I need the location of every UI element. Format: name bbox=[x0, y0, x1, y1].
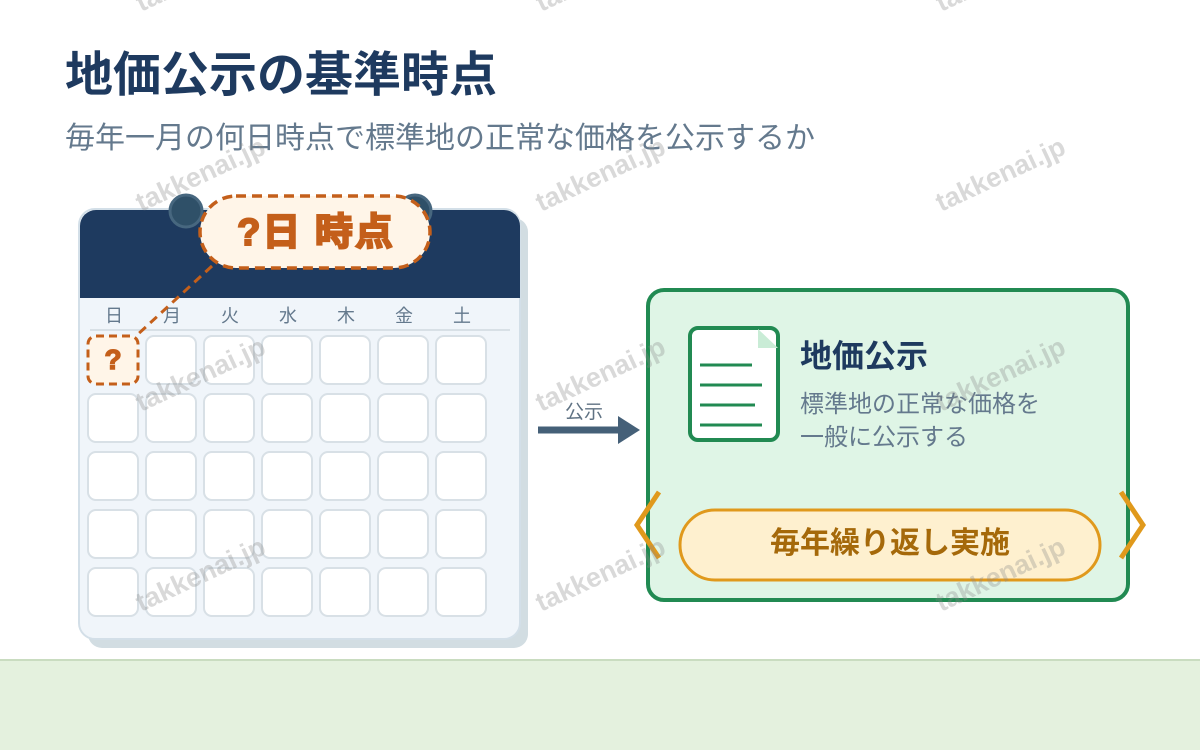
callout badge bbox=[200, 196, 430, 268]
title: 地価公示の基準時点 bbox=[65, 49, 497, 102]
highlighted question cell bbox=[88, 336, 138, 384]
panel description bbox=[800, 391, 1040, 451]
panel description: 一般に公示する bbox=[800, 424, 968, 451]
chevron left bbox=[637, 492, 659, 558]
watermarks: takkenai.jp bbox=[531, 331, 670, 417]
weekday labels: 金 bbox=[395, 306, 413, 326]
watermarks: takkenai.jp bbox=[131, 531, 270, 617]
callout badge: ?日 時点 bbox=[237, 212, 395, 254]
icon: document bbox=[690, 328, 778, 440]
calendar bbox=[79, 195, 528, 648]
arrow to publication bbox=[538, 401, 640, 444]
panel description: 標準地の正常な価格を bbox=[800, 391, 1040, 418]
watermarks: takkenai.jp bbox=[931, 131, 1070, 217]
repeat pill bbox=[680, 510, 1100, 580]
watermarks: takkenai.jp bbox=[531, 531, 670, 617]
weekday labels: 日 bbox=[105, 306, 123, 326]
weekday labels: 月 bbox=[163, 306, 181, 326]
panel: land price publication bbox=[637, 290, 1143, 600]
calendar shadow bbox=[88, 218, 528, 648]
binder ring left bbox=[170, 195, 202, 227]
subtitle: 毎年一月の何日時点で標準地の正常な価格を公示するか bbox=[65, 122, 815, 155]
watermarks: takkenai.jp bbox=[531, 131, 670, 217]
binder ring right bbox=[399, 195, 431, 227]
panel heading: 地価公示 bbox=[800, 338, 928, 374]
date cells bbox=[88, 336, 486, 616]
highlighted question cell: ? bbox=[104, 344, 122, 375]
weekday labels: 水 bbox=[279, 306, 297, 326]
watermarks: takkenai.jp bbox=[931, 531, 1070, 617]
weekday labels: 土 bbox=[453, 306, 471, 326]
weekday labels: 火 bbox=[221, 306, 239, 326]
watermarks: takkenai.jp bbox=[931, 331, 1070, 417]
dashed connector bbox=[136, 266, 212, 336]
chevron right bbox=[1121, 492, 1143, 558]
repeat pill: 毎年繰り返し実施 bbox=[770, 527, 1010, 560]
weekday labels: 木 bbox=[337, 306, 355, 326]
watermarks: takkenai.jp bbox=[131, 331, 270, 417]
calendar header bbox=[80, 210, 520, 298]
bottom band bbox=[0, 659, 1200, 750]
calendar body bbox=[79, 209, 520, 639]
watermarks: takkenai.jp bbox=[131, 131, 270, 217]
arrow to publication: 公示 bbox=[565, 401, 603, 423]
weekday labels bbox=[105, 306, 471, 326]
watermarks bbox=[131, 0, 1070, 617]
